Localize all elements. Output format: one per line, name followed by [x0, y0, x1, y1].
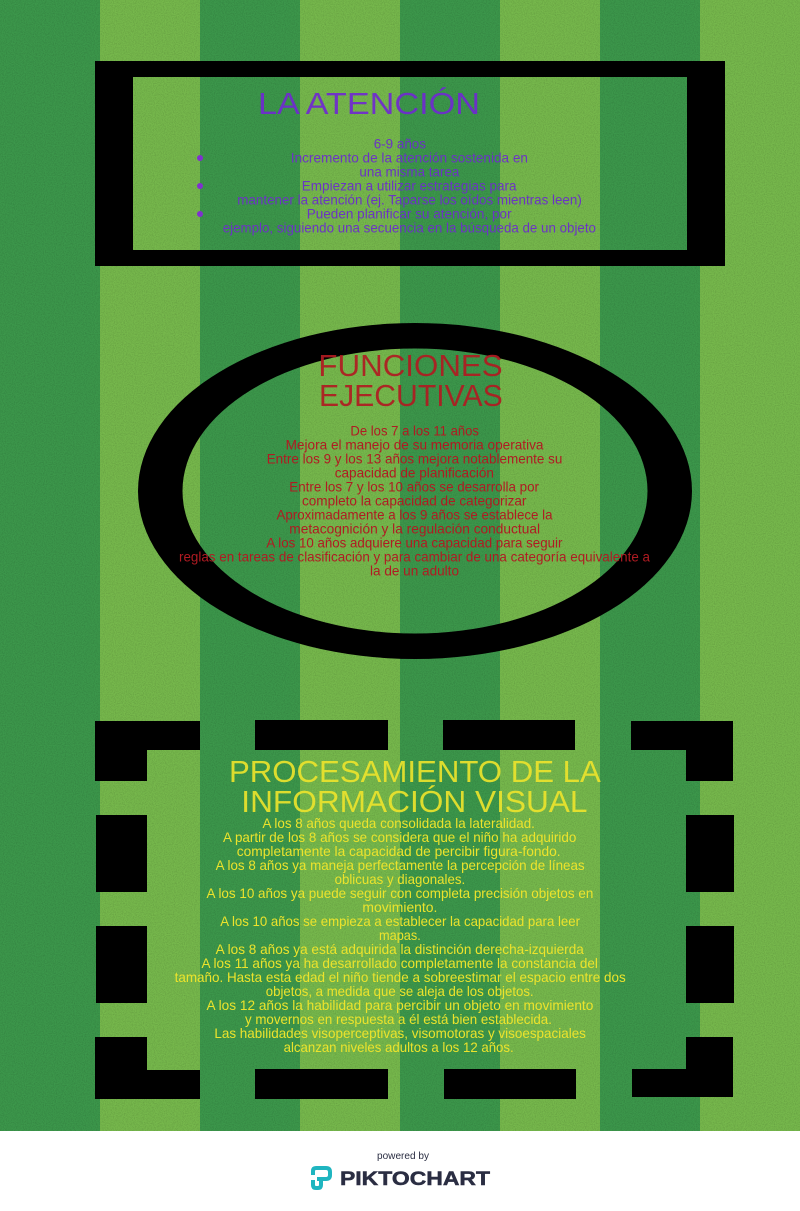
heading: funciones ejecutivas: FUNCIONES	[318, 348, 503, 383]
visual processing body text: A los 12 años la habilidad para percibir un objeto en movimiento	[206, 997, 594, 1013]
attention body text: Pueden planificar su atención, por	[307, 206, 512, 222]
panel: la atención	[95, 61, 725, 266]
icon: piktochart logo	[313, 1168, 330, 1188]
visual processing body text: tamaño. Hasta esta edad el niño tiende a sobreestimar el espacio entre dos	[175, 969, 626, 985]
visual processing body text: A los 8 años ya maneja perfectamente la percepción de líneas	[216, 857, 585, 873]
executive functions body text: capacidad de planificación	[335, 464, 494, 480]
panel: procesamiento de la información visual	[95, 720, 734, 1099]
executive functions body text: Entre los 7 y los 10 años se desarrolla por	[289, 478, 539, 494]
executive functions body text: De los 7 a los 11 años	[350, 422, 479, 438]
footer: piktochart branding	[0, 1131, 800, 1211]
heading: la atención: LA ATENCIÓN	[258, 86, 480, 121]
executive functions body text: reglas en tareas de clasificación y para cambiar de una categoría equivalente a	[179, 548, 650, 564]
attention body text: Incremento de la atención sostenida en	[291, 150, 528, 166]
executive functions body text: metacognición y la regulación conductual	[289, 520, 540, 536]
heading: funciones ejecutivas	[318, 348, 503, 413]
attention body text: una misma tarea	[359, 164, 460, 180]
executive functions body text: Mejora el manejo de su memoria operativa	[286, 436, 544, 452]
executive functions body text	[179, 422, 650, 578]
heading: procesamiento de la información visual: PROCESAMIENTO DE LA	[229, 754, 601, 789]
attention body text: mantener la atención (ej. Taparse los oídos mientras leen)	[237, 192, 582, 208]
visual processing body text: A los 8 años ya está adquirida la distinción derecha-izquierda	[216, 941, 584, 957]
visual processing body text	[175, 815, 626, 1055]
elliptical black frame	[138, 323, 692, 659]
attention body text	[223, 136, 596, 236]
visual processing body text: completamente la capacidad de percibir figura-fondo.	[237, 843, 561, 859]
dashed black frame	[95, 720, 734, 1099]
visual processing body text: movimiento.	[362, 899, 437, 915]
executive functions body text: completo la capacidad de categorizar	[302, 492, 527, 508]
attention body text: ejemplo, siguiendo una secuencia en la búsqueda de un objeto	[223, 220, 596, 236]
heading: funciones ejecutivas: EJECUTIVAS	[319, 378, 503, 413]
panel: funciones ejecutivas	[138, 323, 692, 659]
visual processing body text: A partir de los 8 años se considera que el niño ha adquirido	[223, 829, 577, 845]
attention body text: 6-9 años	[374, 136, 426, 152]
visual processing body text: y movernos en respuesta a él está bien establecida.	[245, 1011, 552, 1027]
visual processing body text: A los 8 años queda consolidada la lateralidad.	[262, 815, 535, 831]
executive functions body text: A los 10 años adquiere una capacidad para seguir	[266, 534, 563, 550]
attention body text: Empiezan a utilizar estrategias para	[302, 178, 517, 194]
visual processing body text: mapas.	[379, 927, 421, 943]
heading: procesamiento de la información visual	[229, 754, 601, 819]
visual processing body text: oblicuas y diagonales.	[335, 871, 465, 887]
visual processing body text: A los 10 años se empieza a establecer la capacidad para leer	[220, 913, 580, 929]
visual processing body text: A los 11 años ya ha desarrollado completamente la constancia del	[202, 955, 598, 971]
executive functions body text: Aproximadamente a los 9 años se establece la	[276, 506, 553, 522]
visual processing body text: alcanzan niveles adultos a los 12 años.	[284, 1039, 514, 1055]
piktochart wordmark: PIKTOCHART	[340, 1169, 490, 1190]
visual processing body text: objetos, a medida que se aleja de los objetos.	[266, 983, 534, 999]
heading: procesamiento de la información visual: INFORMACIÓN VISUAL	[241, 784, 588, 819]
executive functions body text: Entre los 9 y los 13 años mejora notablemente su	[267, 450, 562, 466]
visual processing body text: A los 10 años ya puede seguir con completa precisión objetos en	[206, 885, 593, 901]
visual processing body text: Las habilidades visoperceptivas, visomotoras y visoespaciales	[214, 1025, 586, 1041]
executive functions body text: la de un adulto	[370, 562, 459, 578]
powered by text: powered by	[377, 1150, 430, 1162]
rectangular black frame	[95, 61, 725, 266]
bullet markers	[197, 155, 203, 217]
